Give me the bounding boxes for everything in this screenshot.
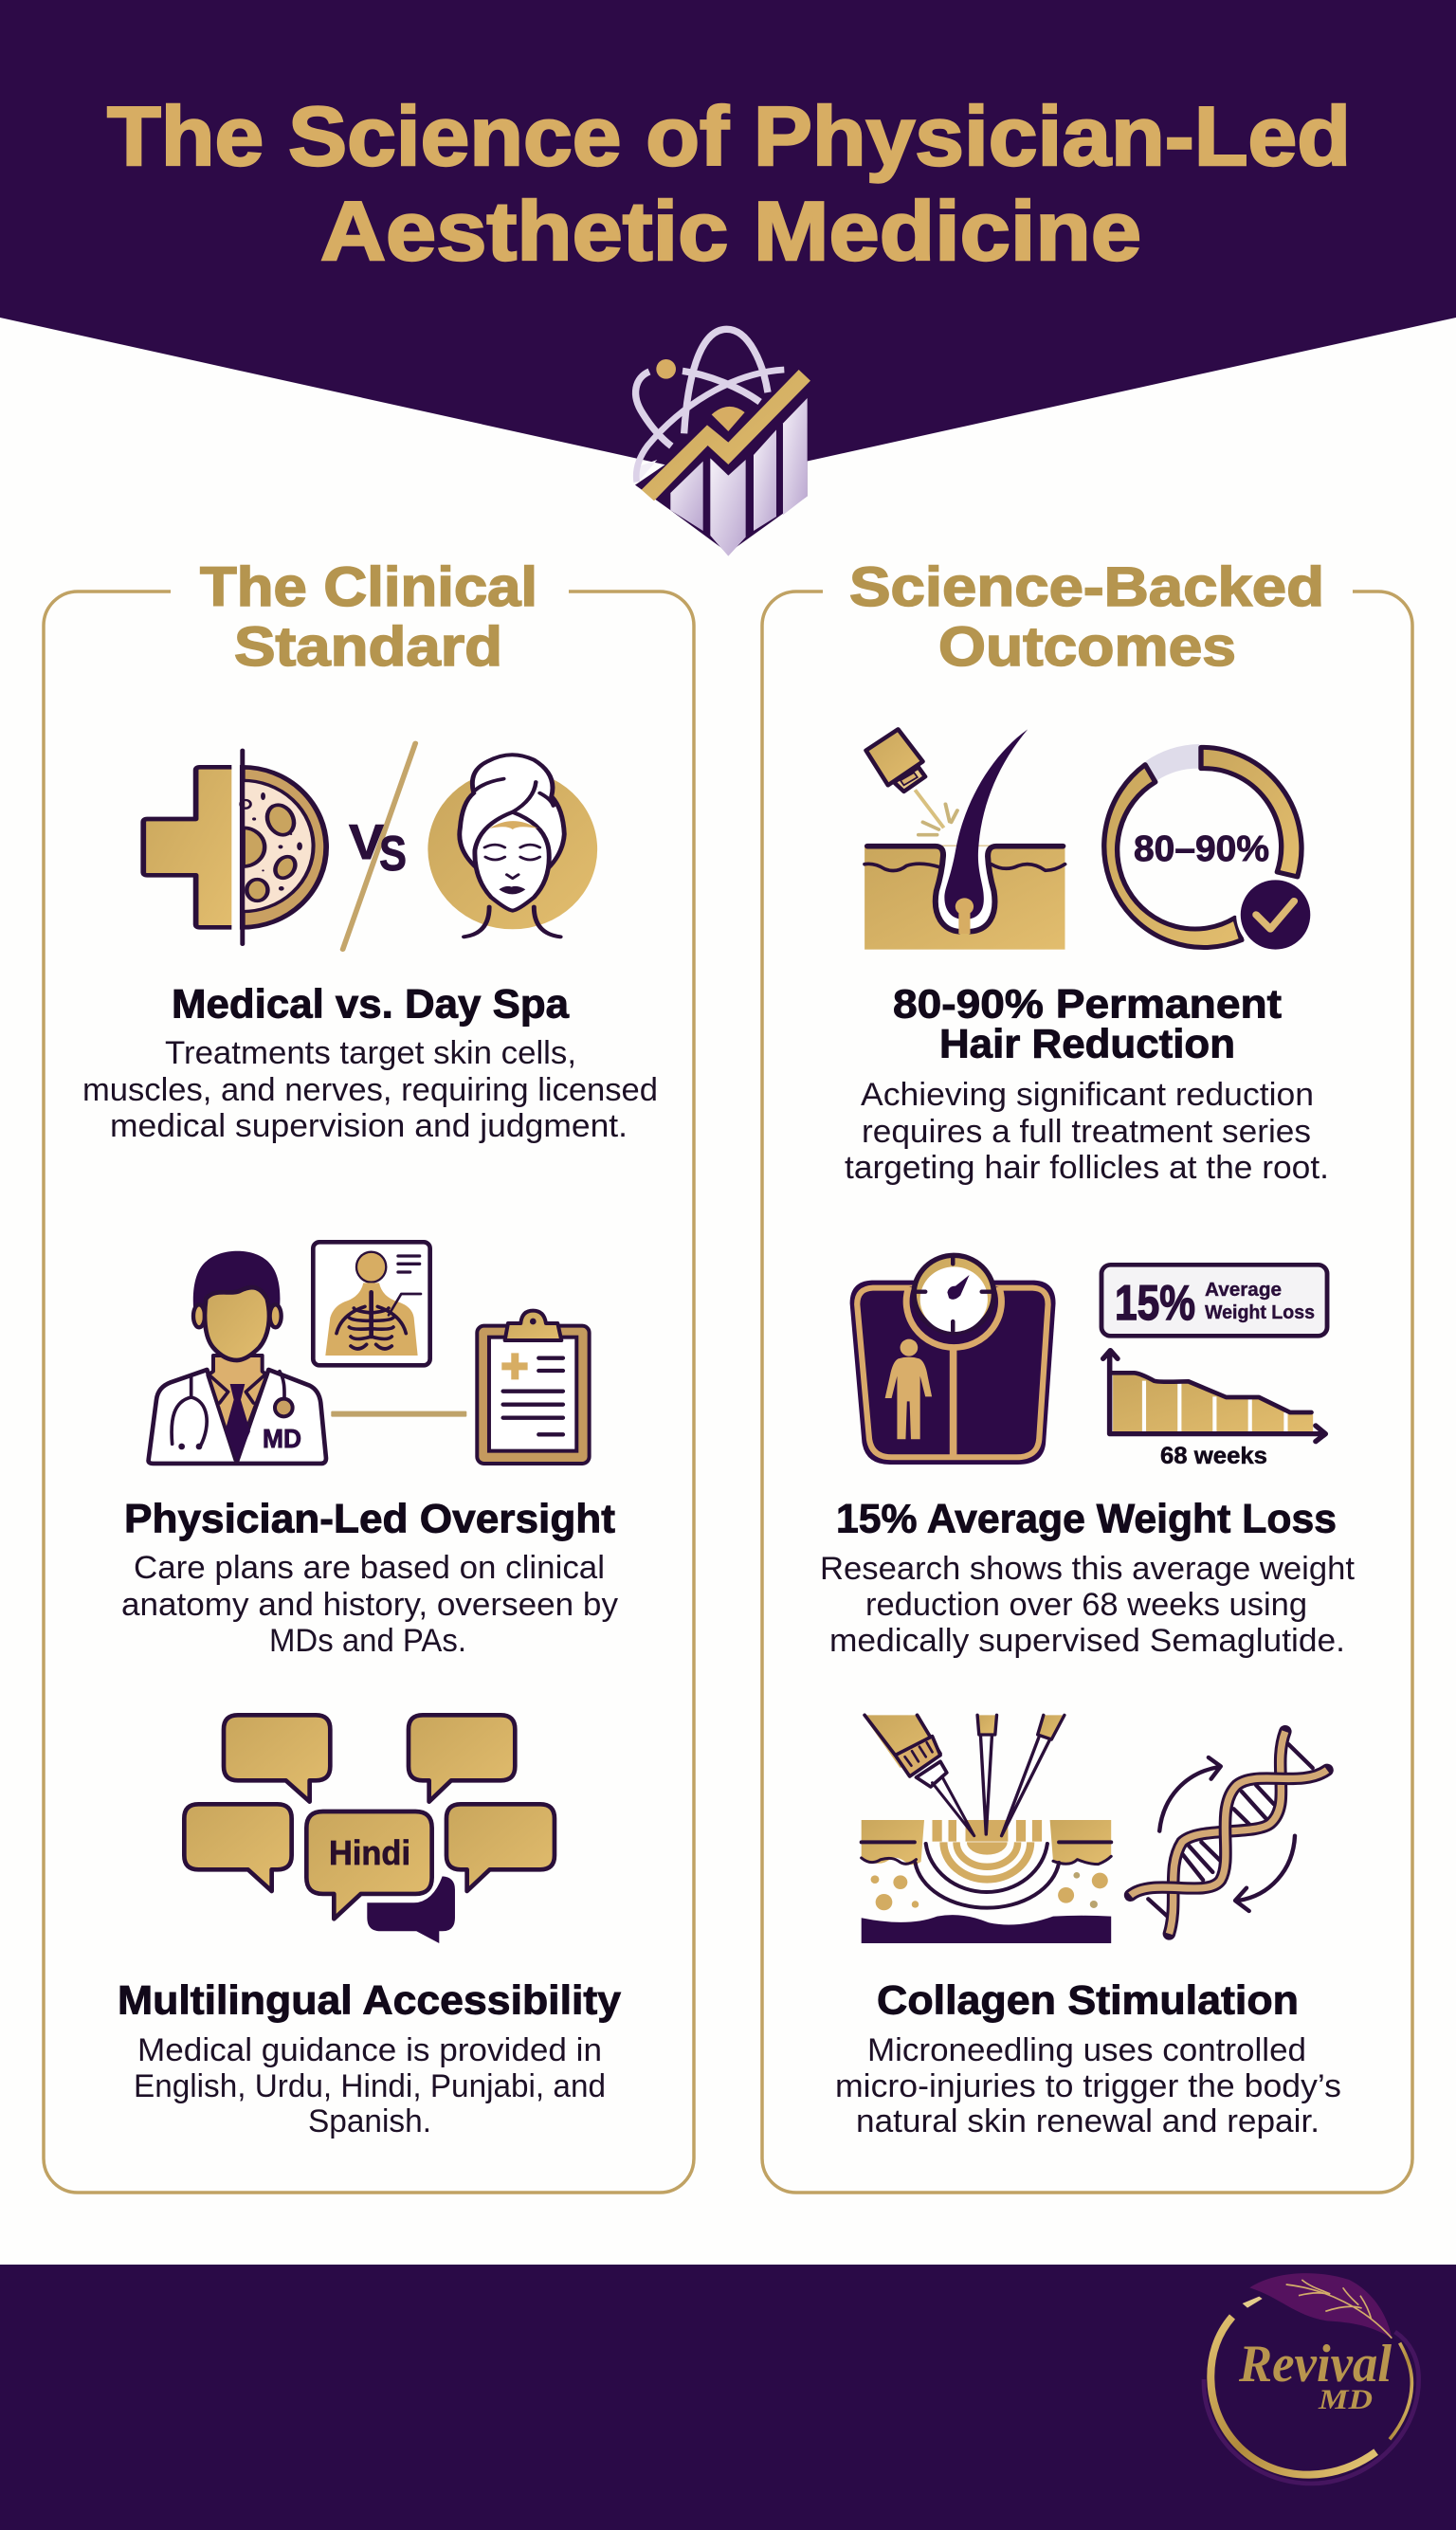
text: hair reduction description [845,1077,1329,1186]
text: hair reduction description: targeting hair follicles at the root. [845,1150,1329,1186]
label: 68 weeks: 68 weeks [1160,1443,1267,1469]
text: hair reduction description: Achieving significant reduction [861,1077,1314,1113]
text: weight loss description [820,1551,1356,1659]
heading: science-backed outcomes: Science-Backed [849,556,1324,618]
text: multilingual description: Spanish. [308,2103,431,2139]
label: MD: MD [263,1424,301,1453]
stat: 15% average weight loss: Average [1205,1280,1282,1301]
text: physician-led description [121,1550,618,1659]
text: weight loss description: medically supervised Semaglutide. [829,1623,1345,1659]
label: vs: S [379,827,407,882]
icon: speech bubbles [184,1715,555,1943]
text: medical vs day spa description [82,1035,658,1144]
text: medical vs day spa description: Treatments target skin cells, [165,1035,576,1071]
icon: scale and weight loss chart [850,1255,1327,1465]
panel: science-backed outcomes [762,556,1412,2193]
logo: Revival MD: MD [1318,2384,1373,2415]
heading: 15% average weight loss: 15% Average Weight Loss [836,1496,1337,1541]
heading: the clinical standard [200,556,537,678]
text: multilingual description: English, Urdu, Hindi, Punjabi, and [134,2068,606,2104]
text: medical vs day spa description: muscles, and nerves, requiring licensed [82,1072,658,1108]
text: multilingual description: Medical guidance is provided in [137,2032,602,2068]
icon: microneedling and DNA [862,1715,1327,1943]
title: Aesthetic Medicine [320,184,1141,278]
text: collagen description [835,2032,1341,2139]
label: 80-90%: 80–90% [1134,829,1269,869]
item: multilingual accessibility [118,1715,621,2139]
stat: 15% average weight loss [1115,1276,1315,1331]
icon: laser on hair follicle and progress ring [864,729,1315,954]
heading: medical vs. day spa: Medical vs. Day Spa [172,982,570,1028]
title [107,89,1351,278]
text: hair reduction description: requires a full treatment series [862,1114,1311,1150]
text: physician-led description: anatomy and history, overseen by [121,1587,618,1623]
heading: science-backed outcomes [849,556,1324,678]
icon: atom and rising chart emblem [633,329,810,556]
icon: medical cross and cell versus spa face [143,743,597,950]
item: medical vs day spa [82,743,658,1144]
heading: 80-90% permanent hair reduction: 80-90% Permanent [893,982,1282,1028]
heading: multilingual accessibility: Multilingual Accessibility [118,1977,621,2023]
item: physician-led oversight [121,1242,618,1659]
label: hindi: Hindi [329,1833,410,1872]
label: vs [349,815,407,882]
text: collagen description: natural skin renewal and repair. [856,2103,1320,2139]
heading: physician-led oversight: Physician-Led Oversight [124,1496,615,1541]
header banner [0,0,1456,479]
stat: 15% average weight loss: Weight Loss [1205,1302,1315,1323]
heading: science-backed outcomes: Outcomes [938,616,1236,678]
text: physician-led description: Care plans are based on clinical [134,1550,605,1586]
text: collagen description: Microneedling uses controlled [867,2032,1306,2068]
heading: 80-90% permanent hair reduction [893,982,1282,1067]
heading: the clinical standard: Standard [234,616,502,678]
text: physician-led description: MDs and PAs. [269,1623,466,1659]
heading: the clinical standard: The Clinical [200,556,537,618]
heading: 80-90% permanent hair reduction: Hair Reduction [939,1022,1235,1067]
icon: doctor, anatomy chart and clipboard [149,1242,590,1464]
label: vs: V [349,815,384,870]
item: permanent hair reduction [845,729,1329,1186]
text: multilingual description [134,2032,606,2139]
text: weight loss description: Research shows this average weight [820,1551,1356,1587]
logo: Revival MD: Revival [1238,2335,1392,2393]
text: weight loss description: reduction over 68 weeks using [865,1587,1307,1623]
logo: Revival MD [1204,2273,1419,2484]
item: collagen stimulation [835,1715,1341,2139]
title: The Science of Physician-Led [107,89,1351,183]
text: medical vs day spa description: medical supervision and judgment. [110,1108,628,1144]
panel: the clinical standard [44,556,694,2193]
item: average weight loss [820,1255,1356,1659]
heading: collagen stimulation: Collagen Stimulation [877,1977,1299,2023]
text: collagen description: micro-injuries to trigger the body’s [835,2068,1341,2104]
footer band [0,2265,1456,2530]
stat: 15% average weight loss: 15% [1115,1276,1195,1331]
